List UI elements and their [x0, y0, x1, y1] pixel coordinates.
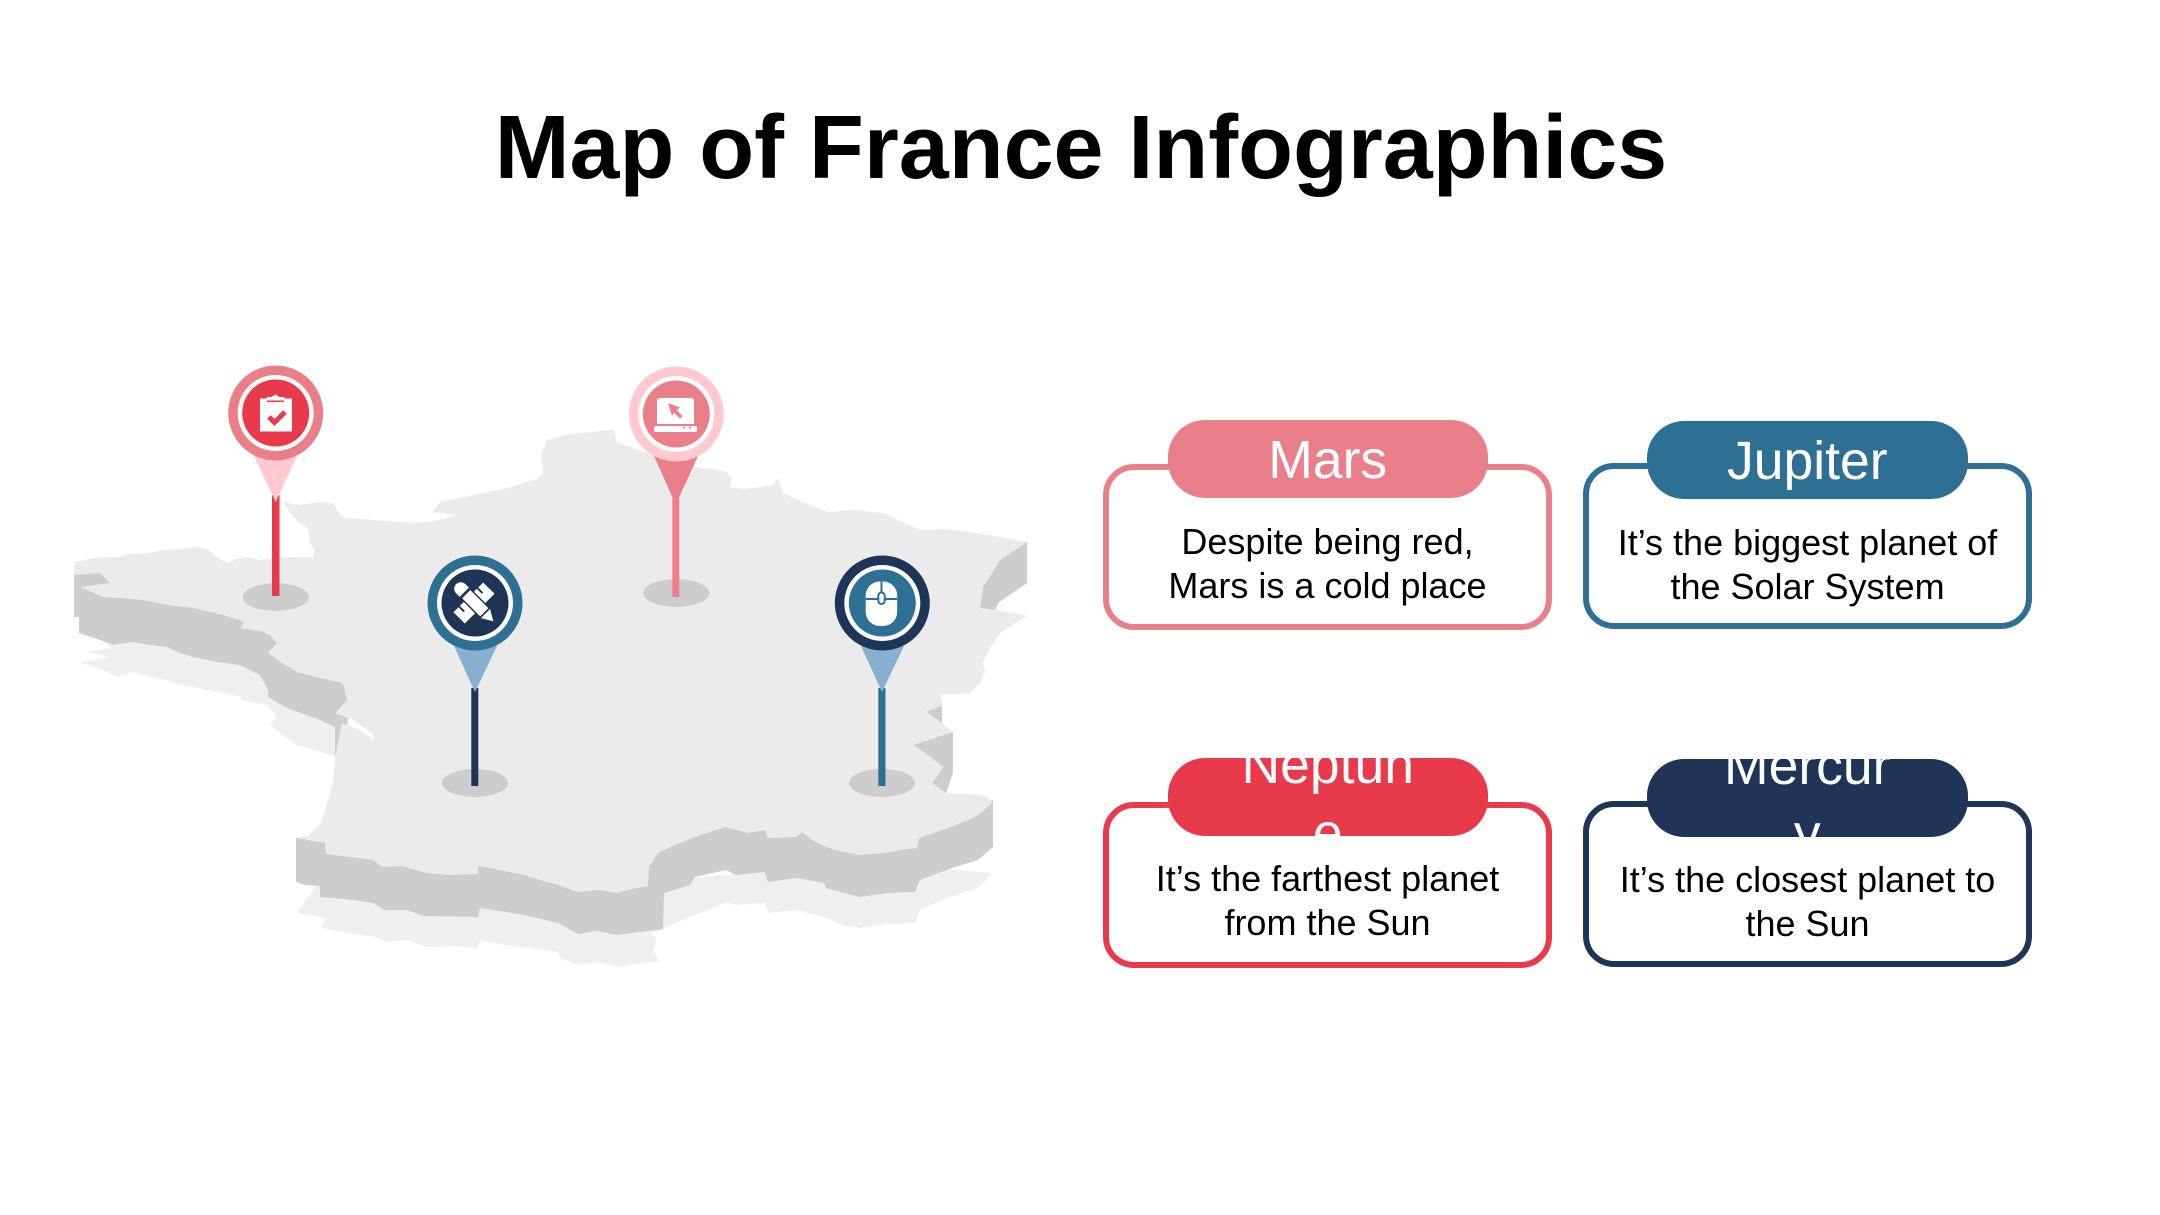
heading: Jupiter: Jupiter [1727, 432, 1888, 491]
text: Neptune description: from the Sun [1224, 902, 1431, 942]
icon: computer mouse [866, 582, 897, 626]
map: side wall [74, 542, 1027, 935]
map: top surface [74, 430, 1027, 893]
text: Mars description: Mars is a cold place [1168, 564, 1487, 606]
heading: Mars: Mars [1268, 431, 1387, 490]
heading: Mercury [1647, 759, 1968, 836]
pin 4: teal mouse [835, 556, 930, 797]
pin 3: pink laptop [629, 366, 724, 607]
panel: Mars [1103, 420, 1552, 630]
pin 1: red clipboard [228, 366, 323, 611]
pin 2: navy pencil and ruler [428, 556, 522, 797]
text: Neptune description: It’s the farthest planet [1156, 858, 1499, 899]
text: Mars description [1168, 521, 1487, 606]
icon: clipboard [260, 394, 292, 432]
icon: pencil and ruler [452, 580, 498, 626]
text: Mercury description: the Sun [1745, 902, 1870, 944]
icon: laptop with cursor [654, 398, 697, 432]
text: Jupiter description [1618, 522, 1998, 606]
heading: Neptune [1168, 758, 1488, 836]
panel: Jupiter [1583, 421, 2032, 629]
heading: Jupiter [1647, 421, 1968, 498]
map of France with pins [74, 366, 1027, 967]
text: Mercury description [1620, 859, 1995, 944]
panel: Mercury [1583, 759, 2032, 967]
map: reflected lower layer [74, 630, 993, 967]
text: Neptune description [1156, 858, 1499, 942]
text: Jupiter description: It’s the biggest planet of [1618, 522, 1997, 563]
text: Jupiter description: the Solar System [1670, 566, 1945, 606]
heading: Mars [1168, 420, 1488, 498]
text: Mars description: Despite being red, [1181, 521, 1474, 562]
text: Mercury description: It’s the closest planet to [1620, 859, 1995, 900]
panel: Neptune [1103, 758, 1552, 968]
title: Map of France Infographics [495, 98, 1667, 198]
